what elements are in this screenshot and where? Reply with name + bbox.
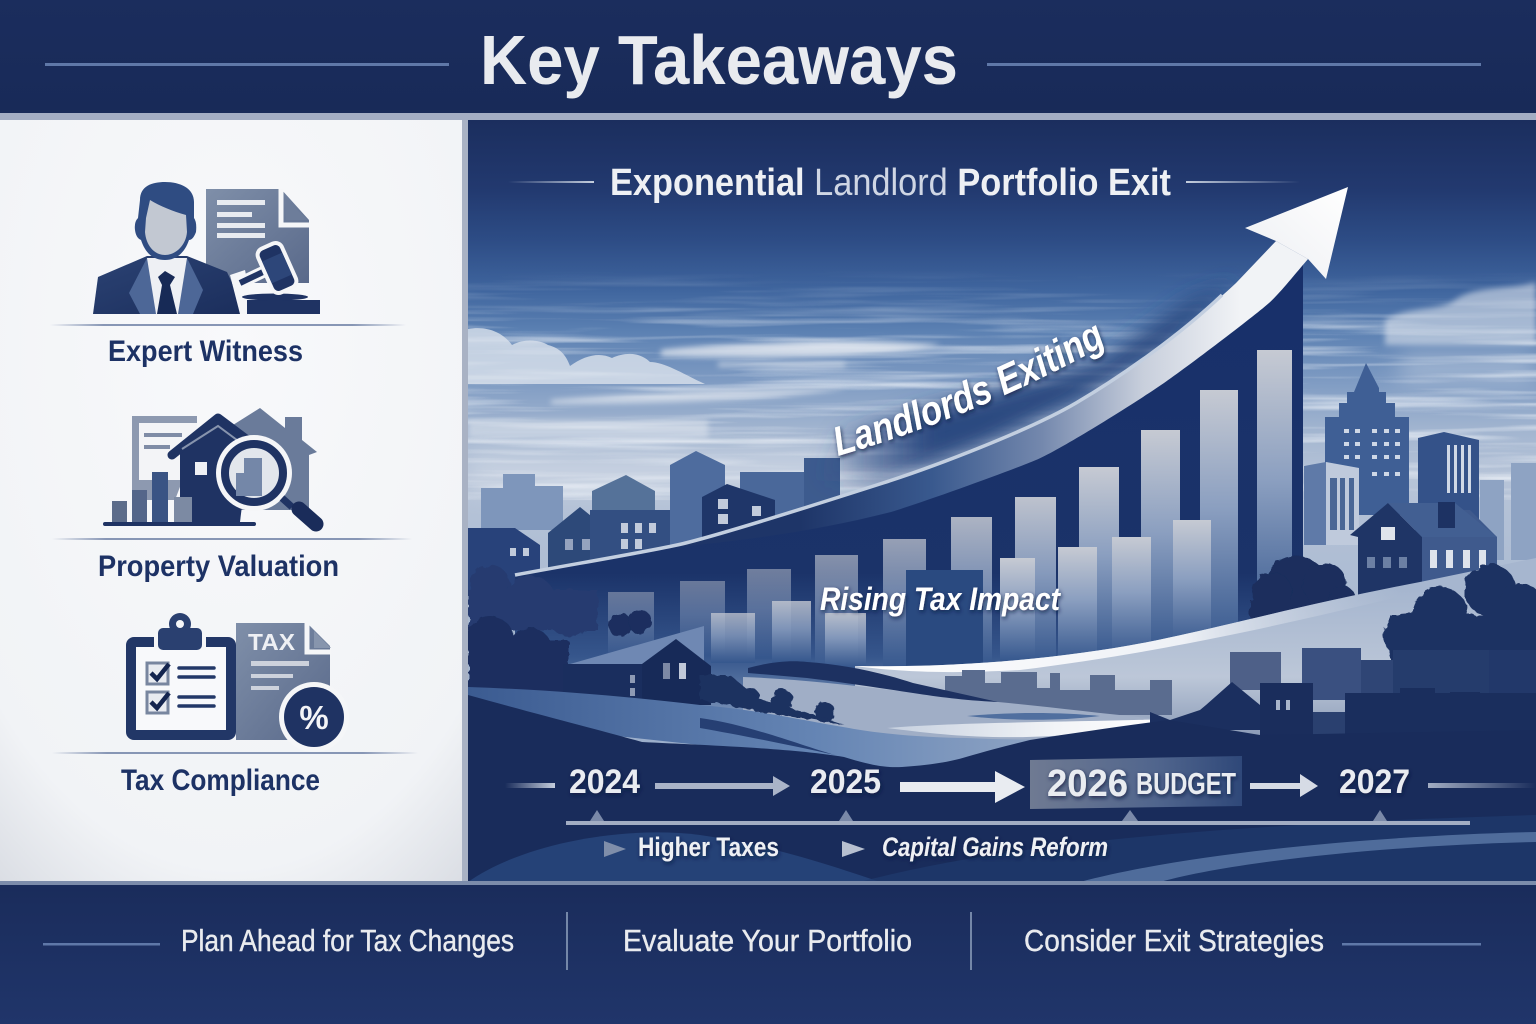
panel: exponential exit illustration [468,137,1536,881]
icon: tax compliance: TAX [248,629,296,655]
label: landlords exiting: Landlords Exiting [833,325,1108,460]
divider: expert witness [50,324,406,326]
near houses left [468,484,775,590]
timeline years [570,768,1410,801]
timeline years: BUDGET [1136,766,1236,801]
title: Key Takeaways [480,21,958,99]
label: tax compliance: Tax Compliance [121,764,320,797]
timeline highlight: 2026 budget [1030,756,1242,809]
dark mass under arrow [515,241,1303,720]
divider: property valuation [52,538,412,540]
arrow: landlords exiting [515,187,1348,575]
header band [0,0,1536,120]
timeline ruler and ticks [566,810,1470,825]
icon: property valuation [103,408,317,526]
takeaway: plan ahead: Plan Ahead for Tax Changes [181,923,514,958]
bullet: capital gains reform: Capital Gains Reform [882,832,1108,862]
timeline arrows [505,771,1536,803]
low skyline [945,648,1536,733]
label: rising tax impact: Rising Tax Impact [820,581,1061,617]
bullet: higher taxes: Higher Taxes [638,832,779,862]
bullet: capital gains reform [842,836,1110,862]
icon: tax compliance: % [299,699,329,736]
timeline years: 2024 [569,763,640,801]
rolling hills [468,661,1480,770]
divider: tax compliance [52,752,418,754]
bullet: higher taxes [604,832,779,862]
takeaway: evaluate portfolio: Evaluate Your Portfolio [623,923,912,958]
left trees and farmhouse [466,565,711,710]
icon: tax compliance [131,613,349,752]
bar chart: rising tax [608,350,1292,670]
right house and trees [1250,502,1497,630]
label: property valuation: Property Valuation [98,550,339,583]
wash above arrow [815,283,1236,483]
timeline years: 2026 [1047,763,1128,805]
timeline base [468,695,1536,882]
panel: services [0,120,468,882]
timeline years: 2025 [810,763,881,801]
label: expert witness: Expert Witness [108,335,303,368]
sky and clouds [468,137,1536,766]
foreground hill with swoosh [855,558,1536,740]
far skyline left [481,451,840,545]
city towers right [1304,363,1536,560]
timeline years: 2027 [1339,763,1410,801]
icon: expert witness [93,182,320,314]
chart heading: Exponential Landlord Portfolio Exit [610,162,1171,204]
takeaway: exit strategies: Consider Exit Strategies [1024,923,1324,958]
footer band [0,881,1536,1024]
